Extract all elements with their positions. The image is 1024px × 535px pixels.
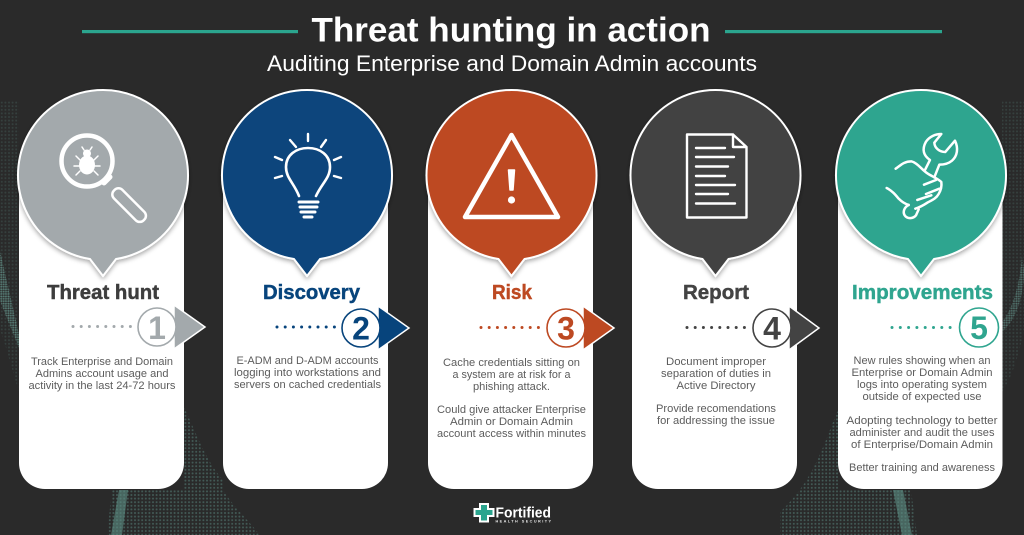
body text: Document improper xyxy=(666,356,766,368)
body text: Track Enterprise and Domain xyxy=(31,356,173,368)
icon: logo cross xyxy=(474,504,494,522)
dotted connector xyxy=(277,326,335,328)
icon: warning triangle xyxy=(465,135,558,217)
body text: servers on cached credentials xyxy=(234,379,382,391)
logo wordmark: Fortified xyxy=(496,504,551,522)
arrow xyxy=(378,306,409,350)
card xyxy=(428,150,593,489)
body text: Admin or Domain Admin xyxy=(450,416,573,428)
subtitle: Auditing Enterprise and Domain Admin accounts xyxy=(267,51,757,76)
title rule left xyxy=(82,30,298,33)
badge circle xyxy=(836,90,1006,276)
step number: 4 xyxy=(763,310,781,346)
step number xyxy=(138,308,176,346)
body text xyxy=(234,355,382,391)
title: Threat hunting in action xyxy=(312,12,710,50)
body text: Provide recomendations xyxy=(656,403,777,415)
step number: 1 xyxy=(148,310,166,346)
body text: a system are at risk for a xyxy=(452,369,570,381)
dotted connector xyxy=(481,326,539,329)
body text: phishing attack. xyxy=(473,381,550,393)
arrow xyxy=(583,306,614,350)
body text: Admins account usage and xyxy=(36,368,168,380)
panel: risk xyxy=(426,90,614,489)
dotted connector xyxy=(687,326,745,329)
heading: Report xyxy=(683,281,749,304)
arrow xyxy=(174,305,205,349)
body text xyxy=(846,355,998,474)
logo: Fortified Health Security xyxy=(474,504,551,524)
heading: Risk xyxy=(492,281,533,304)
body text: Better training and awareness xyxy=(849,462,996,474)
step number: 3 xyxy=(557,310,575,346)
step number xyxy=(547,309,585,347)
body text xyxy=(656,356,777,427)
panel: improvements xyxy=(836,90,1006,489)
step number xyxy=(753,309,791,347)
badge circle xyxy=(222,90,392,276)
card xyxy=(19,150,184,489)
body text: account access within minutes xyxy=(437,428,587,440)
body text: activity in the last 24-72 hours xyxy=(28,380,176,392)
card xyxy=(223,150,388,489)
badge circle xyxy=(18,90,188,276)
step number xyxy=(342,309,380,347)
body text: Cache credentials sitting on xyxy=(443,357,580,369)
heading: Improvements xyxy=(852,281,993,304)
dotted connector xyxy=(892,326,951,329)
icon: document xyxy=(687,134,746,218)
heading: Discovery xyxy=(263,281,361,304)
body text: for addressing the issue xyxy=(657,415,775,427)
heading: Threat hunt xyxy=(47,281,159,304)
dotted connector xyxy=(73,325,131,328)
body text: Enterprise or Domain Admin xyxy=(852,367,992,379)
body text: New rules showing when an xyxy=(854,355,990,367)
panel: discovery xyxy=(222,90,409,489)
title block xyxy=(82,12,942,76)
body text: Could give attacker Enterprise xyxy=(437,404,586,416)
body text: E-ADM and D-ADM accounts xyxy=(236,355,379,367)
body text: of Enterprise/Domain Admin xyxy=(851,439,993,451)
body text: Adopting technology to better xyxy=(846,415,998,427)
panel: report xyxy=(630,90,819,489)
step number: 2 xyxy=(352,310,370,346)
body text: Active Directory xyxy=(676,380,756,392)
body text: logs into operating system xyxy=(857,379,987,391)
body text: logging into workstations and xyxy=(234,367,381,379)
icon: light bulb xyxy=(275,134,341,217)
badge circle xyxy=(426,90,597,276)
badge circle xyxy=(630,90,800,276)
body text xyxy=(437,357,587,440)
icon: hand holding wrench xyxy=(887,134,957,218)
body text: administer and audit the uses xyxy=(850,427,995,439)
title rule right xyxy=(725,30,942,33)
panel: threat hunt xyxy=(18,90,205,489)
arrow xyxy=(789,306,819,350)
card xyxy=(632,150,797,489)
icon: magnifying glass with bug xyxy=(62,136,148,224)
card xyxy=(838,150,1002,489)
body text: outside of expected use xyxy=(862,391,982,403)
step number xyxy=(960,308,998,347)
body text: separation of duties in xyxy=(661,368,771,380)
step number: 5 xyxy=(970,310,988,346)
logo tagline: HEALTH SECURITY xyxy=(496,520,551,524)
body text xyxy=(28,356,176,392)
